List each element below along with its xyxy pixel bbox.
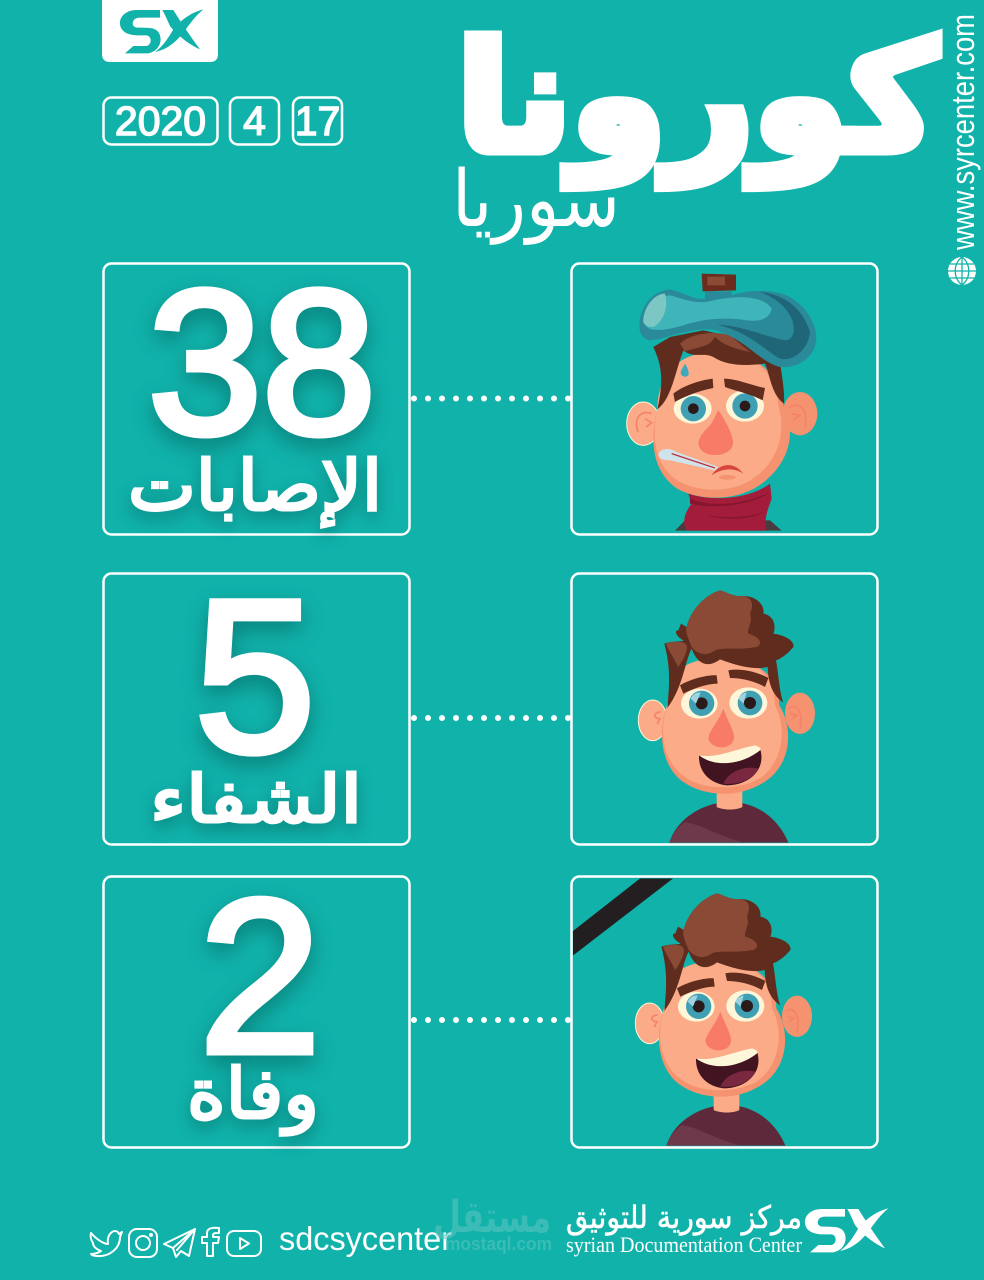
logo: SX header badge	[102, 0, 218, 62]
subtitle: syria: سوريا	[452, 155, 620, 246]
social icons	[91, 1228, 261, 1257]
icon: facebook	[202, 1228, 219, 1256]
logo: SX footer	[805, 1208, 888, 1252]
icon: instagram	[129, 1229, 157, 1257]
label: recovered: الشفاء	[150, 761, 362, 838]
title: corona: كورونا	[457, 12, 938, 187]
mourning ribbon	[573, 878, 673, 956]
date boxes: 2020	[115, 98, 206, 144]
connector dots 2	[414, 715, 570, 721]
illustration: recovered smiling man	[638, 590, 815, 843]
date boxes: 17	[295, 98, 340, 144]
connector dots 3	[414, 1017, 570, 1023]
watermark	[433, 1192, 552, 1254]
illustration: sick man with ice bag and thermometer	[627, 274, 817, 531]
date boxes	[104, 98, 342, 144]
social handle: sdcsycenter	[279, 1220, 452, 1257]
icon: twitter	[91, 1231, 122, 1256]
watermark: مستقل	[433, 1192, 551, 1243]
panel: deaths count	[104, 855, 410, 1148]
organisation name arabic: مركز سورية للتوثيق	[566, 1200, 802, 1236]
label: infections: الإصابات	[128, 445, 382, 528]
panel: infections count	[104, 248, 410, 534]
icon: globe	[948, 257, 976, 285]
icon: youtube	[227, 1231, 261, 1256]
panel: happy face	[572, 574, 878, 844]
illustration: man with mourning ribbon	[635, 893, 812, 1146]
icon: telegram	[164, 1229, 195, 1257]
panel: mourning face	[572, 876, 878, 1148]
date boxes: 4	[243, 98, 266, 144]
number: 38 infections: 38	[148, 248, 376, 477]
label: deaths: وفاة	[187, 1053, 319, 1136]
panel: recovered count	[104, 555, 410, 844]
number: 2 deaths: 2	[199, 855, 321, 1099]
connector dots 1	[414, 396, 570, 402]
panel: sick face	[572, 264, 878, 534]
organisation name english: syrian Documentation Center	[566, 1232, 803, 1257]
watermark: mostaql.com	[445, 1234, 552, 1254]
number: 5 recovered: 5	[195, 555, 315, 797]
